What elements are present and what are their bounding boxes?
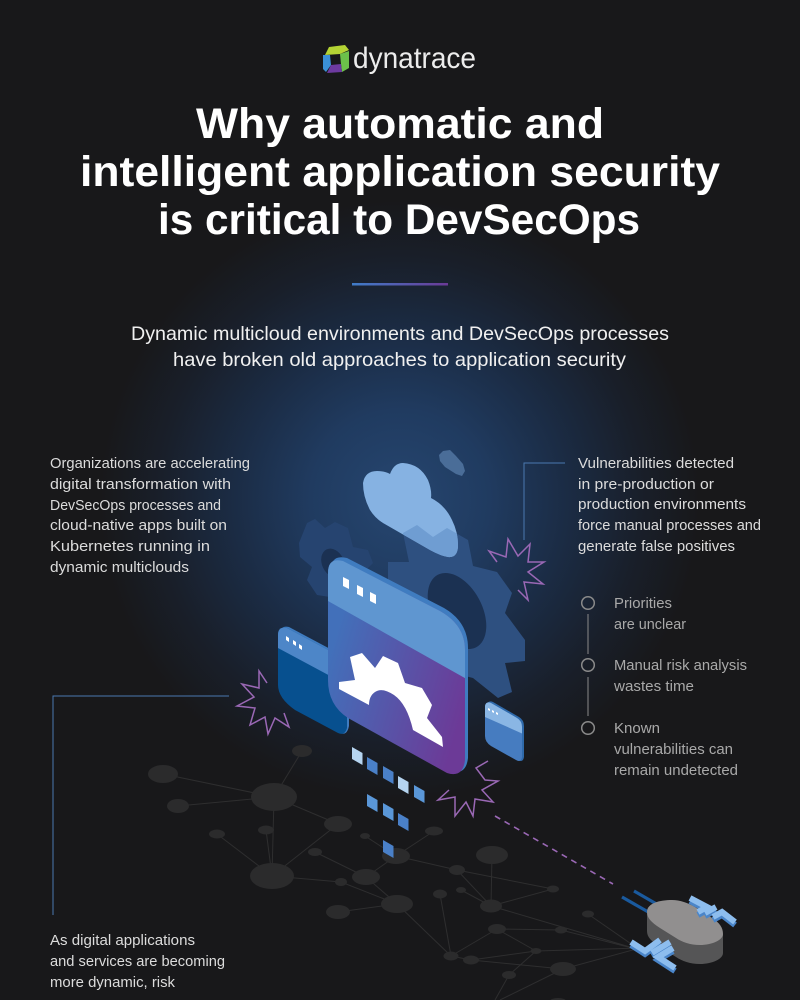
item: manual risk analysis: wastes time xyxy=(613,679,694,695)
title xyxy=(80,100,720,244)
connector: vulnerabilities callout xyxy=(524,463,565,540)
icon: small gear xyxy=(299,519,373,597)
background glow xyxy=(90,190,710,810)
item: known vulnerabilities: vulnerabilities can xyxy=(614,742,733,758)
text block: digital transformation: Organizations are accelerating xyxy=(50,456,250,472)
item: known vulnerabilities: remain undetected xyxy=(614,763,738,779)
icon: large gear xyxy=(388,525,525,698)
text block: risk assessment: As digital applications xyxy=(50,933,195,949)
logo: dynatrace xyxy=(323,42,476,75)
window controls xyxy=(343,577,376,604)
item: manual risk analysis: Manual risk analysis xyxy=(614,658,747,674)
icon: large cloud xyxy=(363,463,458,558)
item: priorities: are unclear xyxy=(614,617,686,633)
subtitle: Dynamic multicloud environments and DevSecOps processes xyxy=(131,323,669,345)
window controls xyxy=(488,708,498,715)
title divider xyxy=(352,283,448,286)
item: priorities: Priorities xyxy=(614,596,672,612)
left contacts xyxy=(631,940,675,971)
text block: vulnerabilities: in pre-production or xyxy=(578,477,714,493)
text block: risk assessment: and services are becoming xyxy=(50,954,225,970)
item: manual risk analysis xyxy=(613,658,747,695)
starburst: upper right xyxy=(489,539,544,600)
item: known vulnerabilities xyxy=(614,721,738,779)
text block: digital transformation: Kubernetes running in xyxy=(50,539,210,555)
device: connector chip xyxy=(622,891,735,971)
text block: vulnerabilities: force manual processes and xyxy=(578,518,761,534)
main browser window xyxy=(328,557,468,774)
text block: digital transformation: DevSecOps processes and xyxy=(50,498,221,514)
left browser window xyxy=(278,626,349,734)
starburst: left xyxy=(237,671,289,734)
network graph xyxy=(148,745,640,1000)
prongs xyxy=(622,891,660,913)
title: is critical to DevSecOps xyxy=(158,196,640,244)
icon: white gear xyxy=(339,653,443,747)
window edge xyxy=(331,557,468,772)
text block: risk assessment: more dynamic, risk xyxy=(50,975,176,991)
connector: risk callout xyxy=(53,696,229,915)
text block: digital transformation: dynamic multiclouds xyxy=(50,560,189,576)
subtitle xyxy=(131,323,669,371)
text block: vulnerabilities: generate false positives xyxy=(578,539,735,555)
timeline list xyxy=(582,596,747,779)
item: known vulnerabilities: Known xyxy=(614,721,660,737)
window controls xyxy=(286,636,302,650)
text block: digital transformation xyxy=(50,456,250,576)
title: intelligent application security xyxy=(80,148,720,196)
subtitle: have broken old approaches to application security xyxy=(173,349,626,371)
title: Why automatic and xyxy=(196,100,604,148)
window body xyxy=(328,561,465,774)
icon: small cloud xyxy=(439,450,465,476)
text block: vulnerabilities: production environments xyxy=(578,497,746,513)
dashed link to device xyxy=(495,816,613,884)
icon: logo cube xyxy=(323,45,349,73)
right contacts xyxy=(690,898,735,925)
text block: digital transformation: cloud-native apps built on xyxy=(50,518,227,534)
text block: vulnerabilities xyxy=(578,456,761,555)
logo wordmark: dynatrace xyxy=(353,42,476,75)
timeline markers xyxy=(582,597,594,734)
text block: risk assessment xyxy=(50,933,225,991)
gear seen through cloud xyxy=(403,525,458,558)
item: priorities xyxy=(614,596,686,633)
capsule body xyxy=(647,905,723,964)
text block: vulnerabilities: Vulnerabilities detected xyxy=(578,456,734,472)
window header xyxy=(328,560,465,678)
starburst: bottom xyxy=(438,761,498,816)
data blocks xyxy=(352,747,424,858)
right browser window xyxy=(485,701,524,761)
text block: digital transformation: digital transformation with xyxy=(50,477,231,493)
